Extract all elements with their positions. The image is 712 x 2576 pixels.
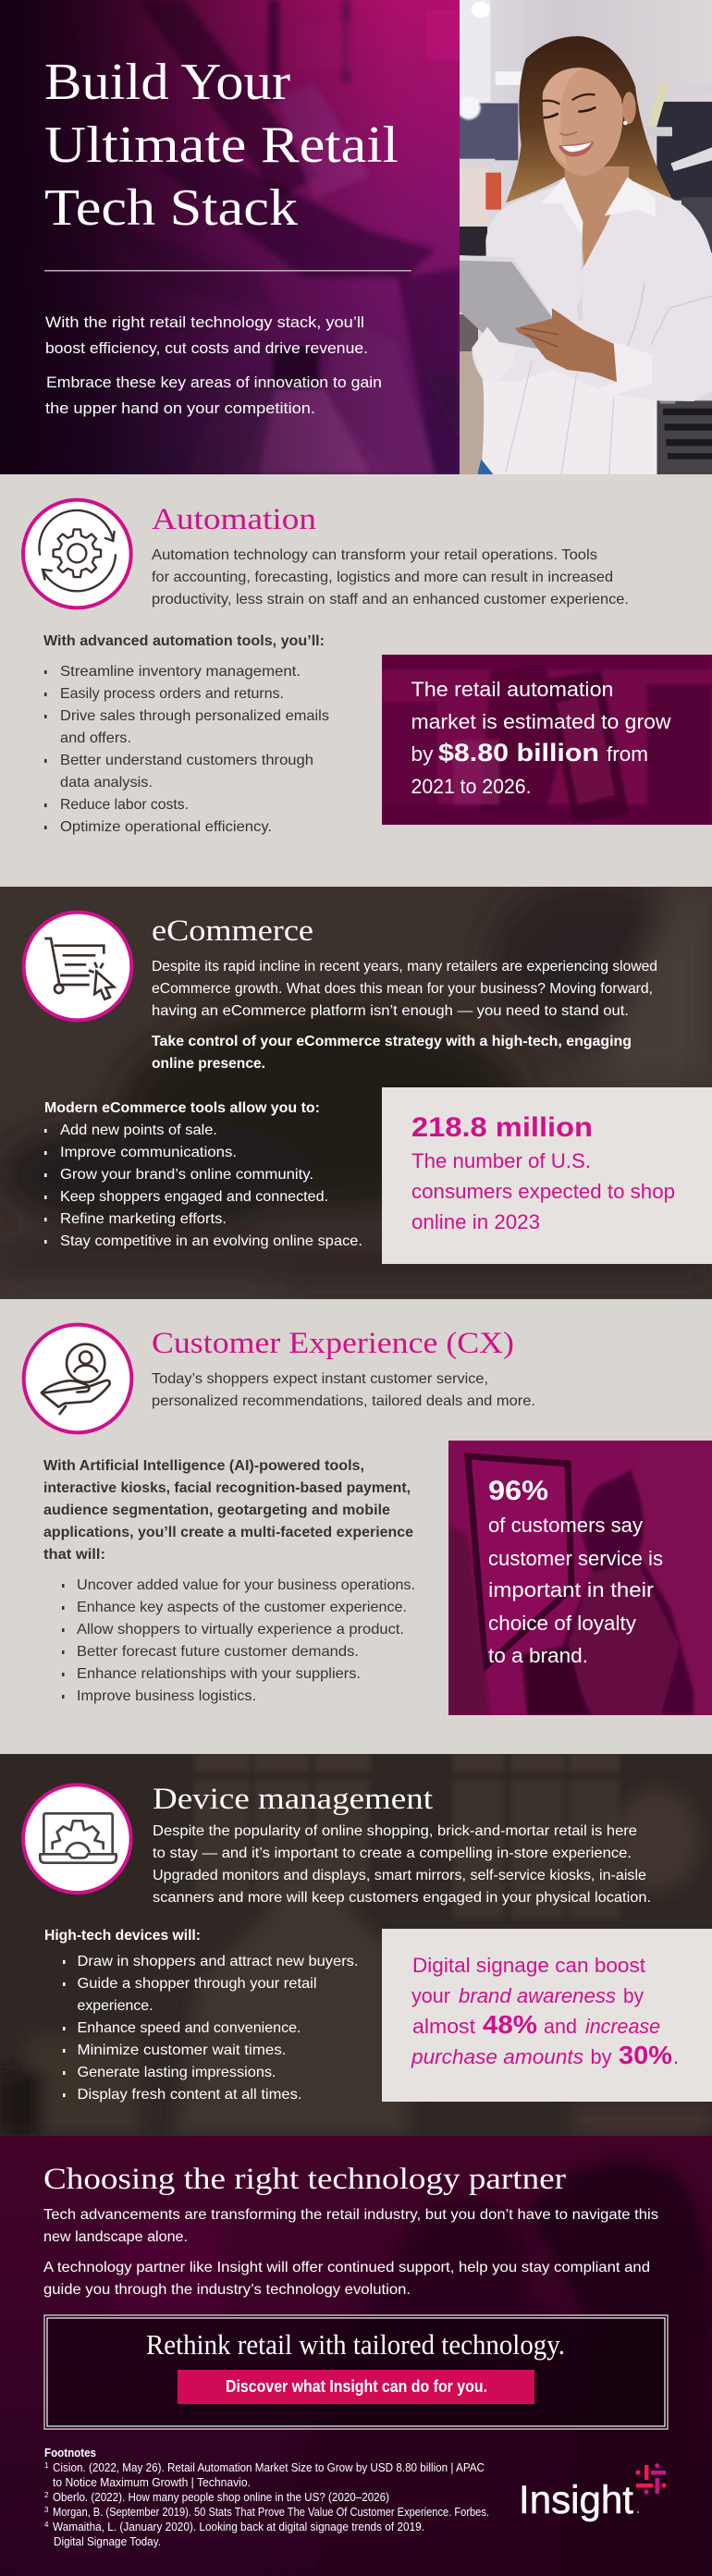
CX bold paragraph: audience segmentation, geotargeting and mobile xyxy=(43,1503,390,1518)
device bullet list: Minimize customer wait times. xyxy=(78,2042,287,2058)
callout: 218.8 million: online in 2023 xyxy=(411,1210,540,1233)
hero title: Tech Stack xyxy=(44,179,298,237)
eCommerce list heading: Modern eCommerce tools allow you to: xyxy=(44,1100,320,1116)
CX bullet list xyxy=(62,1577,415,1704)
callout: 96% of customers: 96% xyxy=(488,1476,548,1506)
device intro: scanners and more will keep customers engaged in your physical location. xyxy=(153,1890,651,1906)
callout: 96% of customers: customer service is xyxy=(488,1547,663,1570)
automation bullet list: Streamline inventory management. xyxy=(60,664,301,680)
cuff xyxy=(596,342,652,395)
Insight logo xyxy=(519,2463,667,2522)
footnotes: Oberlo. (2022). How many people shop online in the US? (2020–2026) xyxy=(53,2490,389,2504)
automation bullet list: and offers. xyxy=(60,730,131,746)
callout: digital signage: brand awareness xyxy=(459,1984,616,2007)
automation bullet list xyxy=(44,664,329,835)
callout: digital signage xyxy=(382,1929,712,2102)
hero title xyxy=(44,54,399,237)
callout: digital signage: purchase amounts xyxy=(411,2045,583,2068)
callout: 96% of customers: to a brand. xyxy=(488,1644,588,1667)
call to action frame: Rethink retail with tailored technology. xyxy=(146,2328,565,2361)
callout: retail automation market: by xyxy=(411,742,433,766)
icon: hand holding person xyxy=(24,1325,131,1432)
automation bullet list: Easily process orders and returns. xyxy=(60,686,284,702)
CX bullet list: Improve business logistics. xyxy=(77,1688,256,1704)
CX bold paragraph: that will: xyxy=(43,1547,105,1563)
panel: customer experience xyxy=(22,1322,712,1715)
footnotes: Wamaitha, L. (January 2020). Looking back at digital signage trends of 2019. xyxy=(53,2520,424,2533)
hero intro text: Embrace these key areas of innovation to gain xyxy=(46,374,382,391)
device bullet list: Enhance speed and convenience. xyxy=(78,2020,301,2036)
eCommerce emphasis: Take control of your eCommerce strategy with a high-tech, engaging xyxy=(152,1034,632,1049)
automation intro: Automation technology can transform your retail operations. Tools xyxy=(152,547,597,563)
hero background: clothing rack in magenta duotone xyxy=(0,0,460,474)
callout: 96% of customers xyxy=(448,1441,712,1715)
callout: digital signage: increase xyxy=(585,2015,660,2038)
automation intro: productivity, less strain on staff and an enhanced customer experience. xyxy=(152,592,629,607)
callout: digital signage: almost xyxy=(412,2015,475,2038)
CX bullet list: Enhance relationships with your suppliers. xyxy=(77,1666,361,1682)
device intro: Upgraded monitors and displays, smart mirrors, self-service kiosks, in-aisle xyxy=(153,1868,646,1883)
CX intro xyxy=(152,1371,535,1409)
eCommerce bullet list: Keep shoppers engaged and connected. xyxy=(60,1189,328,1205)
device list heading: High-tech devices will: xyxy=(44,1928,201,1944)
automation bullet list: Optimize operational efficiency. xyxy=(60,819,272,835)
device bullet list: Guide a shopper through your retail xyxy=(78,1976,316,1992)
heading: Automation: Automation xyxy=(152,503,316,536)
CX bold paragraph: applications, you’ll create a multi-faceted experience xyxy=(43,1525,413,1540)
callout: digital signage: your xyxy=(411,1984,450,2007)
eCommerce intro: eCommerce growth. What does this mean for your business? Moving forward, xyxy=(152,981,653,997)
footnotes: Morgan, B. (September 2019). 50 Stats That Prove The Value Of Customer Experience. Forbes. xyxy=(53,2505,489,2519)
panel: automation xyxy=(21,497,712,834)
partner body text: Tech advancements are transforming the retail industry, but you don’t have to navigate this xyxy=(43,2207,658,2223)
callout: 218.8 million: 218.8 million xyxy=(411,1112,593,1143)
call to action frame xyxy=(44,2315,668,2429)
tablet xyxy=(460,256,555,349)
footnotes: 4 xyxy=(44,2521,49,2529)
callout: 96% of customers: important in their xyxy=(488,1578,654,1601)
face xyxy=(543,67,623,177)
hero intro text: the upper hand on your competition. xyxy=(45,399,315,417)
callout: retail automation market: market is estimated to grow xyxy=(411,710,671,733)
CX intro: personalized recommendations, tailored deals and more. xyxy=(152,1393,535,1409)
callout: 218.8 million: The number of U.S. xyxy=(411,1149,591,1172)
callout: digital signage: 30% xyxy=(619,2041,672,2069)
neck xyxy=(564,166,629,273)
device bullet list: experience. xyxy=(78,1998,153,2014)
footnotes: Cision. (2022, May 26). Retail Automation Market Size to Grow by USD 8.80 billion | APAC xyxy=(53,2460,485,2474)
automation bullet list: Better understand customers through xyxy=(60,753,313,768)
footnotes: to Notice Maximum Growth | Technavio. xyxy=(53,2475,251,2489)
callout: digital signage: by xyxy=(623,1984,644,2007)
callout: retail automation market xyxy=(382,655,712,825)
hero title: Ultimate Retail xyxy=(44,117,399,174)
device bullet list: Generate lasting impressions. xyxy=(78,2065,276,2080)
CX bold paragraph: With Artificial Intelligence (AI)-powered tools, xyxy=(43,1458,364,1474)
CX bullet list: Uncover added value for your business operations. xyxy=(77,1577,415,1593)
eCommerce intro xyxy=(152,959,657,1019)
automation intro: for accounting, forecasting, logistics and more can result in increased xyxy=(152,570,613,585)
partner body text: new landscape alone. xyxy=(43,2229,188,2245)
button: discover xyxy=(178,2370,534,2404)
icon: shopping cart with cursor xyxy=(24,913,131,1020)
CX bold paragraph: interactive kiosks, facial recognition-based payment, xyxy=(43,1480,411,1496)
callout: 96% of customers: choice of loyalty xyxy=(488,1612,636,1635)
CX bullet list: Allow shoppers to virtually experience a product. xyxy=(77,1622,404,1638)
partner body text: guide you through the industry’s technology evolution. xyxy=(43,2282,411,2298)
panel: technology partner xyxy=(0,2136,712,2576)
hero photo: woman holding a tablet xyxy=(457,0,712,474)
eCommerce intro: Despite its rapid incline in recent years, many retailers are experiencing slowed xyxy=(152,959,657,975)
callout: retail automation market: from xyxy=(607,742,648,766)
automation bullet list: Reduce labor costs. xyxy=(60,797,189,813)
automation intro xyxy=(152,547,629,607)
eCommerce bullet list: Grow your brand’s online community. xyxy=(60,1167,313,1183)
Insight logo: Insight xyxy=(519,2478,633,2522)
device intro: to stay — and it’s important to create a compelling in-store experience. xyxy=(153,1846,632,1861)
shirt xyxy=(472,178,712,474)
heading: eCommerce: eCommerce xyxy=(152,914,313,948)
hero intro text: With the right retail technology stack, you’ll xyxy=(45,313,364,331)
panel: device management xyxy=(0,1754,712,2136)
hero intro text: boost efficiency, cut costs and drive revenue. xyxy=(45,339,368,357)
eCommerce bullet list: Stay competitive in an evolving online space. xyxy=(60,1233,362,1249)
callout: digital signage: by xyxy=(590,2045,612,2068)
hero intro text xyxy=(45,313,382,417)
automation list heading: With advanced automation tools, you’ll: xyxy=(43,633,325,649)
heading: Customer Experience: Customer Experience (CX) xyxy=(152,1327,514,1360)
button: discover: Discover what Insight can do for you. xyxy=(226,2377,487,2396)
icon: laptop with gear xyxy=(23,1785,131,1893)
hero panel xyxy=(0,0,712,474)
CX intro: Today’s shoppers expect instant customer service, xyxy=(152,1371,488,1387)
panel: eCommerce xyxy=(0,878,712,1304)
callout: 218.8 million: consumers expected to shop xyxy=(411,1180,675,1203)
footnotes xyxy=(44,2446,489,2548)
callout: digital signage: 48% xyxy=(483,2010,537,2039)
callout: digital signage: and xyxy=(544,2015,577,2038)
eCommerce emphasis: online presence. xyxy=(152,1056,265,1072)
eCommerce bullet list: Add new points of sale. xyxy=(60,1122,217,1138)
partner body text xyxy=(43,2207,658,2298)
automation bullet list: data analysis. xyxy=(60,775,153,791)
heading: choosing the right partner: Choosing the right technology partner xyxy=(43,2163,566,2196)
callout: retail automation market: $8.80 billion xyxy=(438,739,599,767)
hero title: Build Your xyxy=(44,54,290,111)
device intro xyxy=(153,1823,651,1906)
eCommerce intro: having an eCommerce platform isn’t enough — you need to stand out. xyxy=(152,1003,629,1019)
footnotes: 2 xyxy=(44,2491,49,2499)
CX bold paragraph xyxy=(43,1458,413,1563)
hair xyxy=(506,36,675,203)
device bullet list: Draw in shoppers and attract new buyers. xyxy=(78,1954,359,1969)
callout: retail automation market: The retail automation xyxy=(411,678,614,701)
eCommerce bullet list xyxy=(44,1122,362,1249)
hand xyxy=(515,308,618,382)
footnotes: 3 xyxy=(44,2506,49,2514)
device bullet list: Display fresh content at all times. xyxy=(78,2087,301,2103)
callout: digital signage: . xyxy=(673,2045,679,2068)
eCommerce bullet list: Refine marketing efforts. xyxy=(60,1211,227,1227)
heading: Device management: Device management xyxy=(153,1783,433,1816)
callout: 218.8 million xyxy=(382,1087,712,1264)
eCommerce emphasis xyxy=(152,1034,632,1072)
callout: retail automation market: 2021 to 2026. xyxy=(411,775,531,798)
footnotes: Digital Signage Today. xyxy=(54,2534,161,2548)
callout: digital signage: Digital signage can boost xyxy=(412,1954,645,1977)
footnotes: 1 xyxy=(44,2461,49,2470)
partner body text: A technology partner like Insight will offer continued support, help you stay compliant and xyxy=(43,2260,650,2275)
callout: 96% of customers: of customers say xyxy=(488,1514,643,1537)
device bullet list xyxy=(63,1954,359,2103)
CX bullet list: Enhance key aspects of the customer experience. xyxy=(77,1600,407,1615)
device intro: Despite the popularity of online shopping, brick-and-mortar retail is here xyxy=(153,1823,637,1839)
footnotes: Footnotes xyxy=(44,2446,96,2459)
automation bullet list: Drive sales through personalized emails xyxy=(60,708,329,724)
CX bullet list: Better forecast future customer demands. xyxy=(77,1644,359,1660)
eCommerce bullet list: Improve communications. xyxy=(60,1145,237,1160)
icon: gear with cycle arrows xyxy=(23,500,131,607)
